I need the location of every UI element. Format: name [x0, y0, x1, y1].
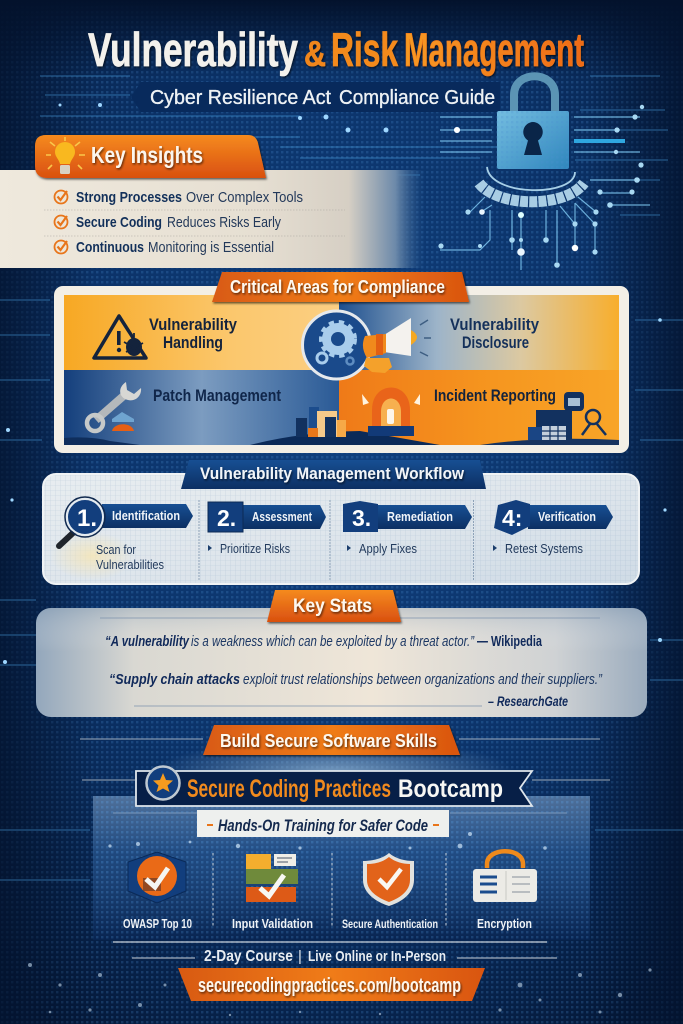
feature: secure authentication: Secure Authentication [342, 917, 438, 931]
bootcamp banner: Bootcamp [398, 775, 503, 803]
panel: key stats [36, 590, 647, 717]
panel: critical areas for compliance [54, 272, 629, 453]
step 2: assessment: Assessment [252, 510, 313, 524]
step 4: verification: Retest Systems [505, 542, 583, 556]
heading tab [212, 272, 469, 302]
quadrant: patch management: Patch Management [153, 386, 281, 405]
heading tab [267, 590, 401, 622]
inner arc [487, 167, 575, 190]
course details: 2-Day Course [204, 948, 293, 965]
heading tab [181, 460, 486, 489]
quadrant: patch management [64, 370, 339, 445]
panel: key insights: Key Insights [91, 142, 203, 168]
quadrant: incident reporting [339, 370, 619, 445]
quadrant: vulnerability disclosure: Vulnerability [450, 315, 539, 334]
url button [178, 968, 485, 1001]
insight 3: Monitoring is Essential [148, 239, 274, 256]
feature: owasp top 10: OWASP Top 10 [123, 916, 192, 931]
heading tab: Vulnerability Management Workflow [200, 465, 464, 483]
segmented arc [479, 183, 584, 202]
title: & [304, 33, 326, 74]
title [88, 23, 584, 76]
step 3: remediation: Remediation [387, 510, 453, 524]
shackle [514, 76, 555, 111]
circuit lines [440, 117, 650, 270]
feature: input validation [232, 854, 313, 931]
step 2: assessment [208, 502, 326, 556]
insight 2: Secure Coding [76, 214, 162, 231]
quadrant: vulnerability disclosure: Disclosure [462, 333, 529, 352]
tagline: Hands-On Training for Safer Code [218, 816, 428, 835]
icon: warning triangle with bug [94, 316, 146, 358]
keyhole [523, 122, 543, 155]
course details [132, 948, 557, 965]
icon: wrench [87, 382, 141, 431]
subtitle ribbon [131, 82, 500, 112]
insight 2 [54, 214, 281, 231]
quote: wikipedia: “A vulnerability [105, 634, 190, 650]
step 1: identification: Vulnerabilities [96, 558, 164, 572]
step 2: assessment: 2. [217, 505, 236, 531]
step 3: remediation: 3. [352, 505, 371, 531]
subtitle ribbon: Cyber Resilience Act [150, 87, 331, 109]
icon: alarm siren [362, 388, 420, 436]
bootcamp banner [136, 766, 532, 806]
icon: light bulb [46, 137, 85, 174]
icon: padlock with circuit [438, 76, 650, 270]
feature: encryption: Encryption [477, 916, 532, 931]
step 1: identification: Scan for [96, 543, 136, 557]
quote: researchgate: “Supply chain attacks [109, 671, 240, 688]
quote: researchgate: – ResearchGate [488, 694, 568, 709]
insight 1: Over Complex Tools [186, 189, 303, 206]
title: Management [404, 23, 584, 76]
step 4: verification [493, 500, 613, 556]
course details: | [298, 948, 302, 965]
insight 3: Continuous [76, 239, 144, 256]
subtitle ribbon: Compliance Guide [339, 87, 495, 109]
quadrant: incident reporting: Incident Reporting [434, 386, 556, 405]
heading tab: Build Secure Software Skills [220, 731, 437, 751]
step 1: identification: 1. [77, 505, 97, 532]
step 2: assessment: Prioritize Risks [220, 542, 290, 556]
step 4: verification: 4: [502, 505, 522, 531]
heading tab [203, 725, 460, 755]
quadrant: vulnerability handling: Handling [163, 333, 223, 352]
quote: wikipedia: — Wikipedia [477, 634, 543, 650]
title: Risk [331, 23, 399, 76]
feature: owasp top 10 [123, 852, 192, 931]
feature: secure authentication [342, 853, 438, 931]
quote: researchgate [109, 671, 603, 709]
panel: vulnerability management workflow [43, 460, 639, 584]
insights background [0, 170, 425, 268]
feature: encryption [473, 851, 537, 931]
step 1: identification [59, 497, 193, 572]
step 4: verification: Verification [538, 510, 596, 524]
heading tab: Key Stats [293, 596, 372, 617]
feature: input validation: Input Validation [232, 916, 313, 931]
url button: securecodingpractices.com/bootcamp [198, 975, 461, 997]
quadrant: vulnerability handling: Vulnerability [149, 315, 237, 334]
step 3: remediation: Apply Fixes [359, 542, 417, 556]
heading tab: Critical Areas for Compliance [230, 277, 445, 297]
megaphone [363, 318, 431, 373]
insight 1: Strong Processes [76, 189, 182, 206]
step 1: identification: Identification [112, 509, 180, 523]
course details: Live Online or In-Person [308, 948, 446, 965]
tagline [197, 810, 449, 837]
step 3: remediation [343, 501, 472, 556]
quadrant: vulnerability handling [64, 295, 339, 370]
quadrant: vulnerability disclosure [339, 295, 619, 370]
insight 1 [54, 189, 303, 206]
title: Vulnerability [88, 23, 298, 76]
insight 3 [54, 239, 274, 256]
panel: key insights [0, 135, 425, 268]
icon: gear disc with megaphone [302, 311, 431, 379]
lock body [497, 111, 569, 169]
panel: secure coding bootcamp [93, 725, 590, 1001]
heading tab [35, 135, 266, 178]
insight 2: Reduces Risks Early [167, 214, 281, 231]
icon: building and magnifier [528, 392, 606, 440]
quote: wikipedia: is a weakness which can be exploited by a threat actor.” [191, 634, 475, 650]
icon: skyline bars [250, 407, 440, 445]
bootcamp banner: Secure Coding Practices [187, 775, 391, 803]
